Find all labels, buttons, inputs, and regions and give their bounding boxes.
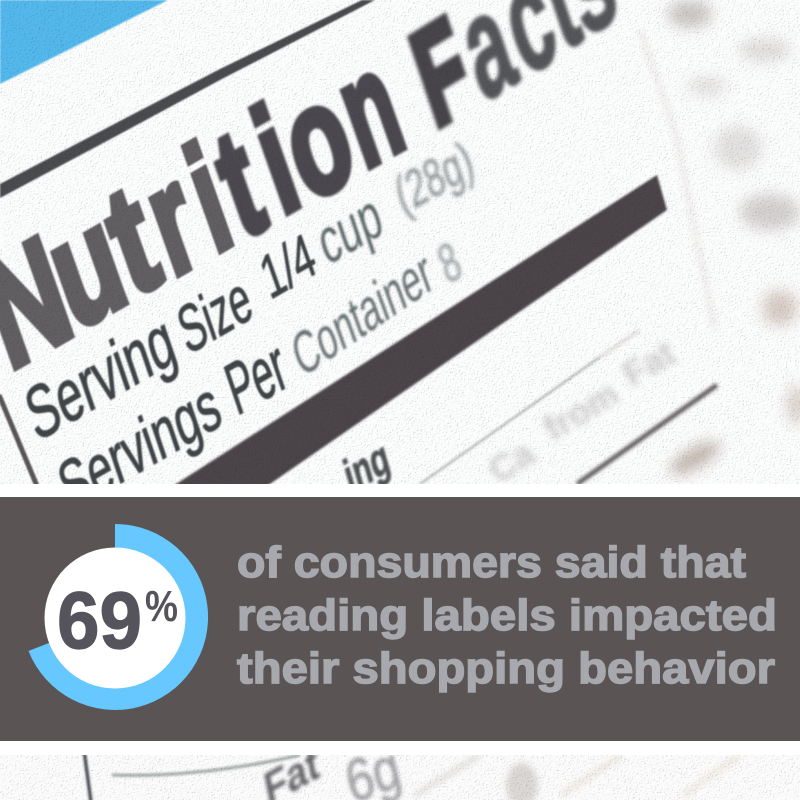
blurred strip smudges <box>415 755 740 800</box>
big number 69%: % <box>145 582 178 631</box>
statement text: their shopping behavior <box>237 644 775 693</box>
blurred text: Calories from Fat: from <box>536 373 626 449</box>
blurred text: Calories from Fat: Fat <box>615 332 682 395</box>
text: cup: cup <box>309 179 390 279</box>
statement text: of consumers said that <box>237 538 746 587</box>
heading: Nutrition: r <box>127 130 216 308</box>
vertical rule <box>84 750 91 800</box>
heading: Nutrition: u <box>29 170 143 362</box>
label left border line <box>0 395 37 486</box>
text: Total Fat 6g <box>262 755 404 800</box>
white center circle <box>44 548 186 688</box>
text: 8: 8 <box>430 229 469 296</box>
heading: Facts <box>404 0 619 133</box>
blue packaging corner <box>0 0 168 84</box>
dark rule bar <box>173 175 667 486</box>
faint column divider <box>640 30 715 330</box>
text: Serving Size 1/4: 1/4 <box>252 220 324 312</box>
text: Serving Size 1/4: Size <box>169 261 260 369</box>
progress ring 69% <box>28 524 208 710</box>
statement text <box>237 538 777 693</box>
stat band <box>0 497 800 741</box>
heading: Nutrition, focus falloff letters: o <box>263 46 372 235</box>
statement text: reading labels impacted <box>237 591 777 640</box>
heading: Nutrition, focus falloff letters: n <box>319 15 420 200</box>
text: Serving Size 1/4: Serving <box>16 298 185 458</box>
text: Container: Container <box>284 239 441 390</box>
faint rule extension <box>600 330 640 357</box>
text: Serving Size 1/4 <box>26 234 316 438</box>
blurred right column smudges <box>666 0 800 481</box>
heading: Nutrition: i <box>169 112 248 284</box>
grey rule <box>112 755 300 775</box>
blurred text: Calories from Fat: Ca <box>481 432 542 491</box>
heading: Nutrition, focus falloff letters: t <box>197 95 281 270</box>
heading: Nutrition <box>0 136 236 373</box>
blurred text: Calories from Fat <box>488 342 678 482</box>
heading: Nutrition, focus falloff letters <box>212 71 409 238</box>
photo strip: bottom of label <box>81 755 742 800</box>
text: Servings Per <box>58 347 286 484</box>
faint rule <box>420 357 600 484</box>
text: (28g): (28g) <box>388 129 480 226</box>
label top border line <box>0 0 375 198</box>
big number 69%: 69 <box>57 576 142 666</box>
photo: nutrition facts label close-up <box>0 0 800 527</box>
text: Amount per Serving fragment: ing <box>338 430 395 504</box>
text: Servings Per: Servings <box>49 366 230 527</box>
heading: Nutrition: t <box>87 152 176 329</box>
text: Servings Per: Per <box>216 324 296 431</box>
heading: Nutrition, focus falloff letters: i <box>236 74 316 247</box>
lower dark rule <box>577 385 717 484</box>
